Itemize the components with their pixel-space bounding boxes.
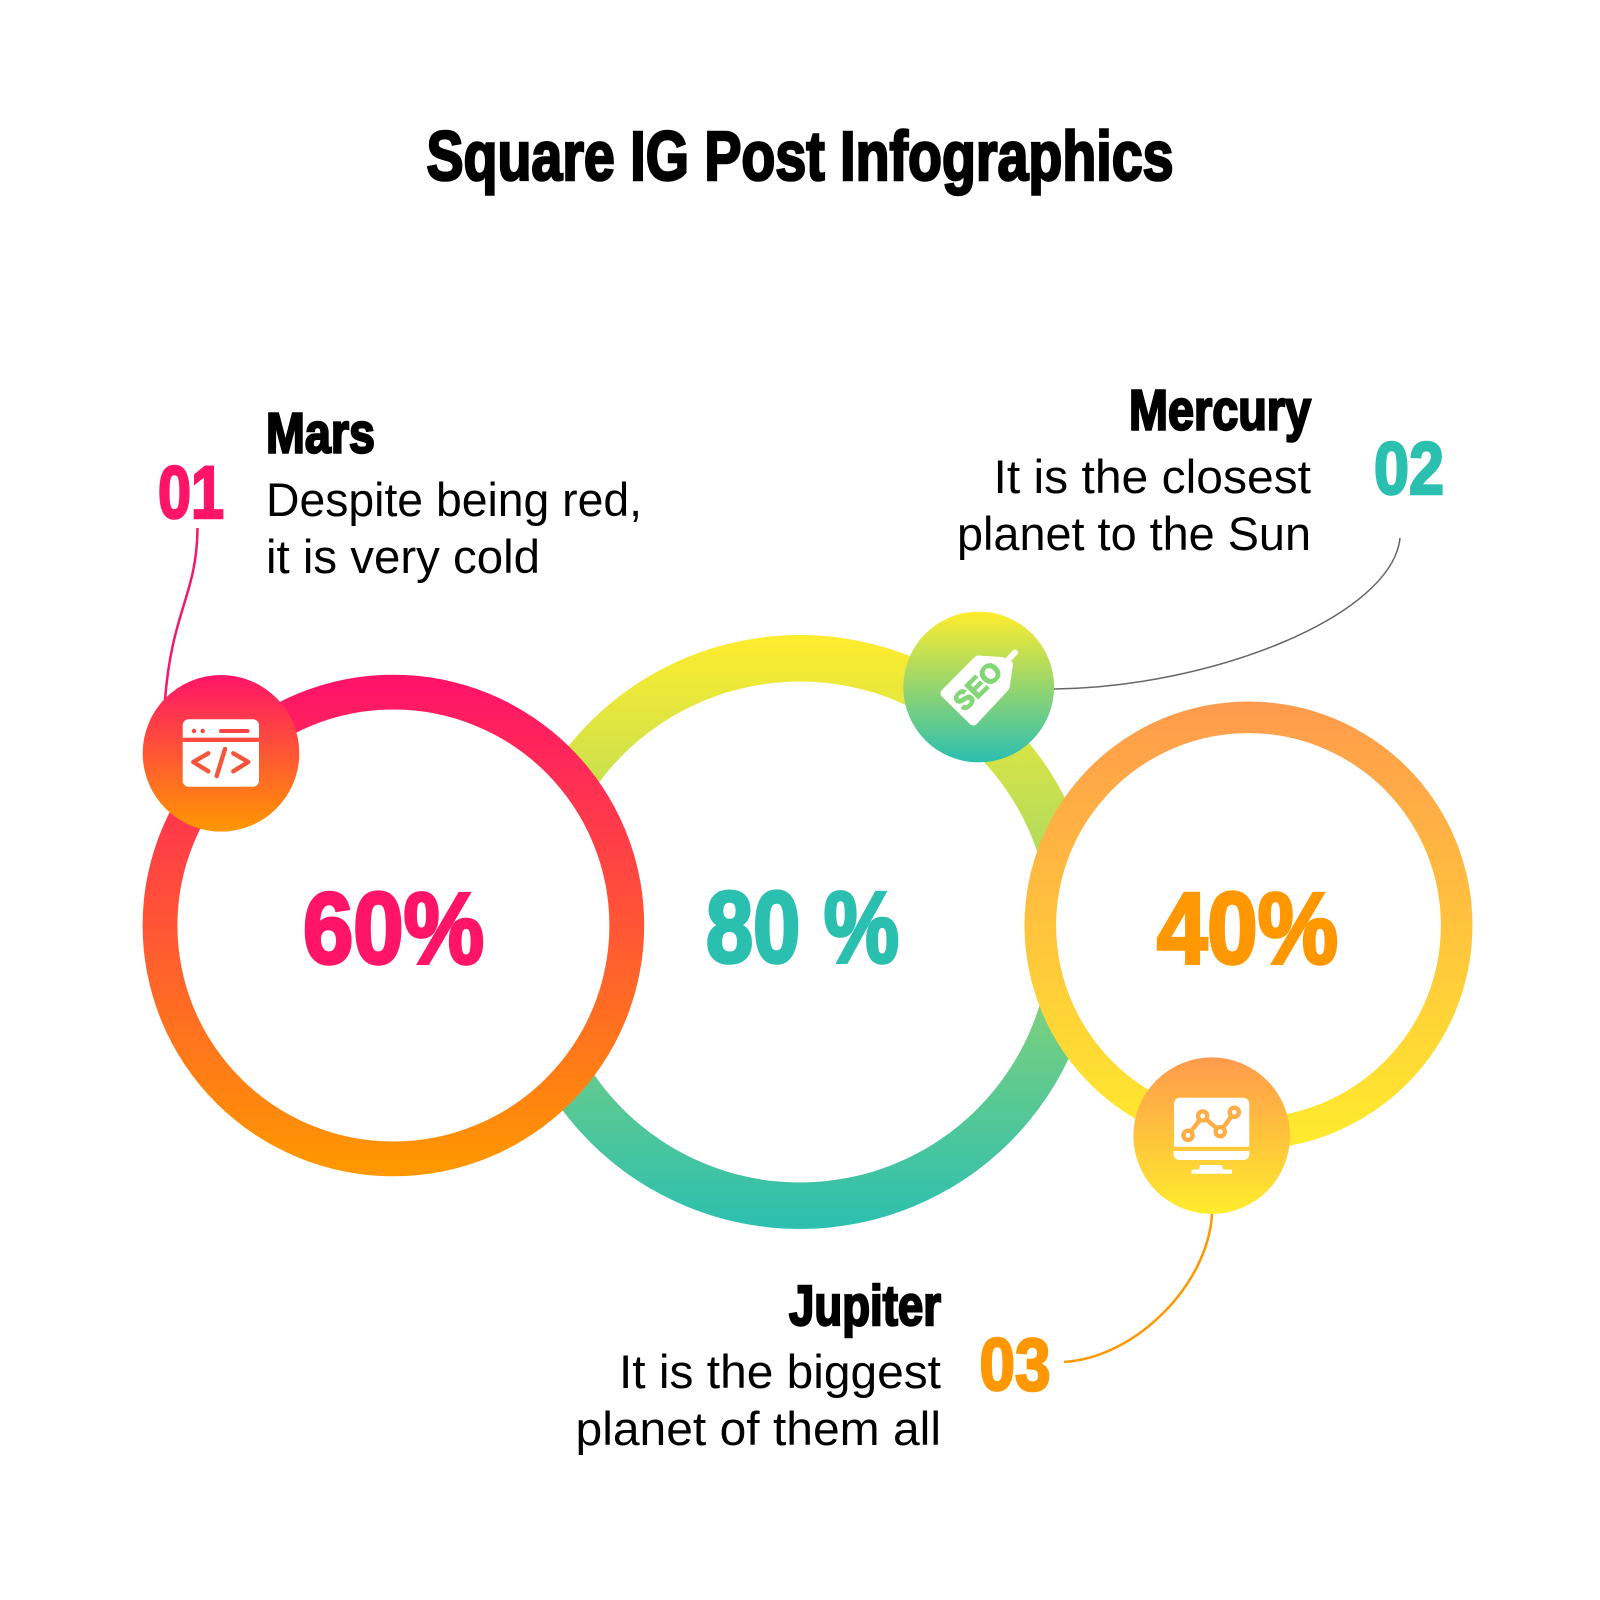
ring: 80% centre	[503, 635, 1097, 1229]
description: Jupiter: planet of them all	[576, 1402, 941, 1455]
ring: 40% right	[1024, 702, 1472, 1150]
connector: Mars	[165, 528, 198, 700]
title: Square IG Post Infographics	[426, 117, 1174, 195]
description: Mars: it is very cold	[266, 530, 540, 583]
value: 40%: 40%	[1157, 873, 1338, 985]
icon: SEO tag: SEO	[947, 656, 1008, 717]
number 03: 03	[980, 1323, 1050, 1406]
heading: Mars: Mars	[266, 402, 375, 466]
callout: Jupiter	[576, 1274, 1050, 1455]
description: Jupiter: It is the biggest	[619, 1345, 941, 1398]
description: Mars: Despite being red,	[266, 473, 642, 526]
callout: Mercury	[957, 378, 1444, 560]
number 02: 02	[1374, 427, 1444, 510]
description: Mercury	[957, 450, 1311, 560]
connector: Jupiter	[1064, 1214, 1212, 1362]
description: Jupiter	[576, 1345, 941, 1455]
description: Mars	[266, 473, 642, 583]
icon: SEO tag	[903, 612, 1054, 762]
ring: 60% left	[143, 675, 644, 1176]
description: Mercury: It is the closest	[994, 450, 1311, 503]
description: Mercury: planet to the Sun	[957, 507, 1311, 560]
icon: monitor chart	[1133, 1057, 1290, 1214]
number 01: 01	[158, 451, 224, 534]
value: 80 %: 80 %	[706, 872, 899, 984]
icon: code window	[143, 675, 299, 832]
callout: Mars	[158, 402, 642, 583]
value: 60%: 60%	[303, 873, 484, 985]
heading: Jupiter: Jupiter	[789, 1274, 941, 1338]
connector: Mercury	[1054, 538, 1400, 689]
heading: Mercury: Mercury	[1129, 378, 1311, 442]
